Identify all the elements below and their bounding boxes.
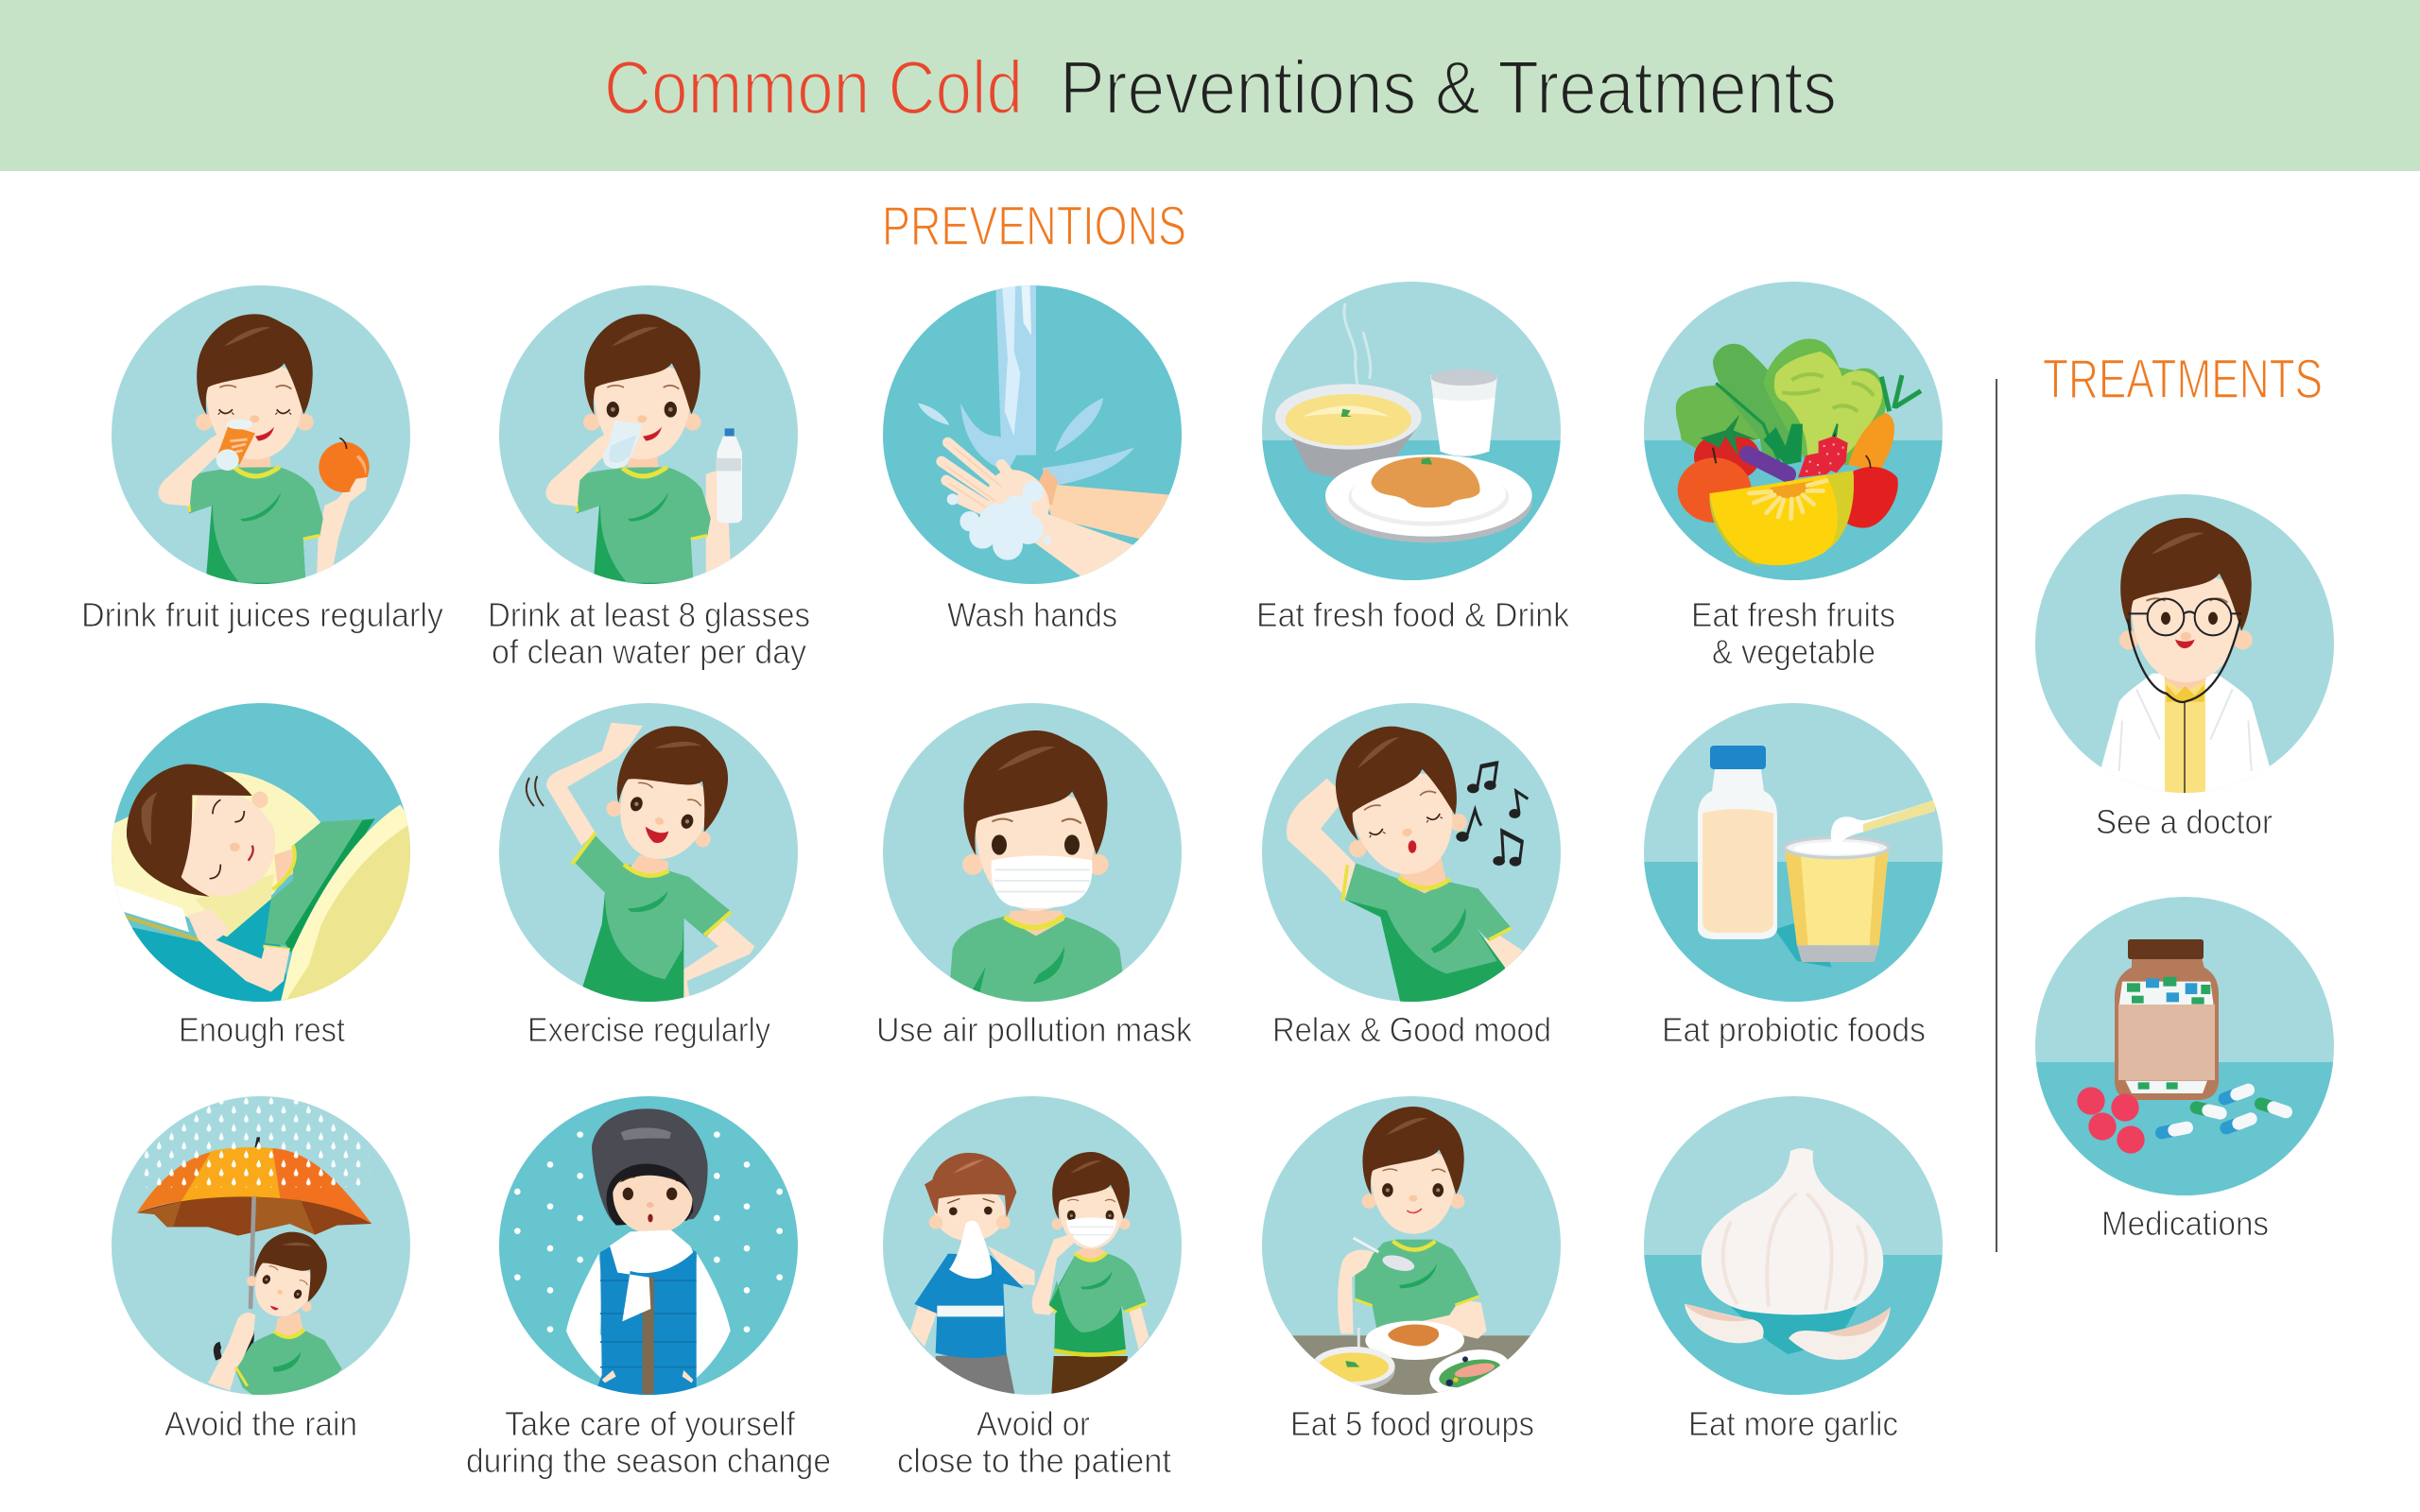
label: Medications — [2101, 1204, 2269, 1243]
label: Wash hands — [947, 595, 1117, 634]
divider line — [1996, 379, 1997, 1252]
icon: boy drinking juice — [112, 285, 410, 585]
label: Drink fruit juices regularly — [81, 595, 443, 634]
icon: fruit and vegetable pile — [1644, 282, 1943, 580]
icon: boy drinking water — [499, 285, 798, 585]
panel: fruits and vegetable — [1637, 282, 1952, 671]
heading: preventions: PREVENTIONS — [882, 196, 1186, 257]
label — [466, 1404, 831, 1480]
icon: boy wearing mask — [883, 703, 1182, 1008]
panel: probiotic foods — [1636, 703, 1951, 1049]
panel: fresh food — [1254, 282, 1570, 634]
label: Eat probiotic foods — [1662, 1010, 1926, 1049]
icon: milk bottle and yogurt — [1644, 703, 1943, 1002]
header band — [0, 0, 2420, 171]
icon: garlic bulb and cloves — [1644, 1096, 1943, 1395]
icon: boy stretching — [499, 703, 798, 1012]
panel: avoid the patient — [883, 1096, 1182, 1480]
panel: air pollution mask — [876, 703, 1193, 1049]
label: Enough rest — [179, 1010, 345, 1049]
label line 2: close to the patient — [897, 1441, 1171, 1480]
label — [488, 595, 810, 671]
title: common cold: Common Cold — [604, 45, 1023, 129]
heading: treatments: TREATMENTS — [2043, 349, 2323, 410]
panel: relax — [1262, 703, 1561, 1049]
label line 2: & vegetable — [1712, 632, 1876, 671]
label: Exercise regularly — [527, 1010, 770, 1049]
icon: doctor with stethoscope — [2035, 494, 2334, 802]
title: preventions and treatments: Preventions & Treatments — [1060, 45, 1837, 129]
label line 2: of clean water per day — [492, 632, 806, 671]
panel: enough rest — [104, 703, 419, 1049]
label: See a doctor — [2096, 802, 2273, 841]
icon: boy sleeping in bed — [104, 703, 419, 1009]
label: Eat 5 food groups — [1290, 1404, 1534, 1443]
icon: boy in winter clothes — [499, 1096, 798, 1400]
label: Use air pollution mask — [876, 1010, 1193, 1049]
icon: pill bottle and capsules — [2035, 897, 2334, 1195]
panel: wash hands — [883, 279, 1184, 634]
title — [604, 45, 1837, 129]
label line 2: during the season change — [466, 1441, 831, 1480]
panel: eat garlic — [1636, 1096, 1951, 1443]
label: Eat more garlic — [1688, 1404, 1898, 1443]
icon: sick boy and boy with mask — [883, 1096, 1182, 1400]
label: Avoid the rain — [164, 1404, 357, 1443]
panel: see a doctor — [2035, 494, 2334, 841]
label line 1: Eat fresh fruits — [1691, 595, 1895, 634]
label — [897, 1404, 1171, 1480]
label line 1: Drink at least 8 glasses — [488, 595, 810, 634]
icon: soup, plate and milk — [1262, 282, 1561, 580]
panel: medications — [2028, 897, 2342, 1243]
panel: drink water — [488, 285, 810, 671]
panel: five food groups — [1257, 1096, 1572, 1443]
icon: boy eating at table — [1262, 1096, 1561, 1395]
icon: boy with umbrella in rain — [112, 1096, 410, 1397]
panel: drink fruit juices — [81, 285, 443, 634]
icon: boy relaxing with music — [1262, 703, 1561, 1011]
panel: exercise — [499, 703, 798, 1049]
label line 1: Avoid or — [977, 1404, 1090, 1443]
icon: washing hands under tap — [883, 279, 1184, 588]
label: Eat fresh food & Drink — [1256, 595, 1570, 634]
panel: season change — [466, 1096, 831, 1480]
label line 1: Take care of yourself — [505, 1404, 796, 1443]
label: Relax & Good mood — [1272, 1010, 1551, 1049]
panel: avoid the rain — [112, 1096, 410, 1443]
label — [1691, 595, 1895, 671]
